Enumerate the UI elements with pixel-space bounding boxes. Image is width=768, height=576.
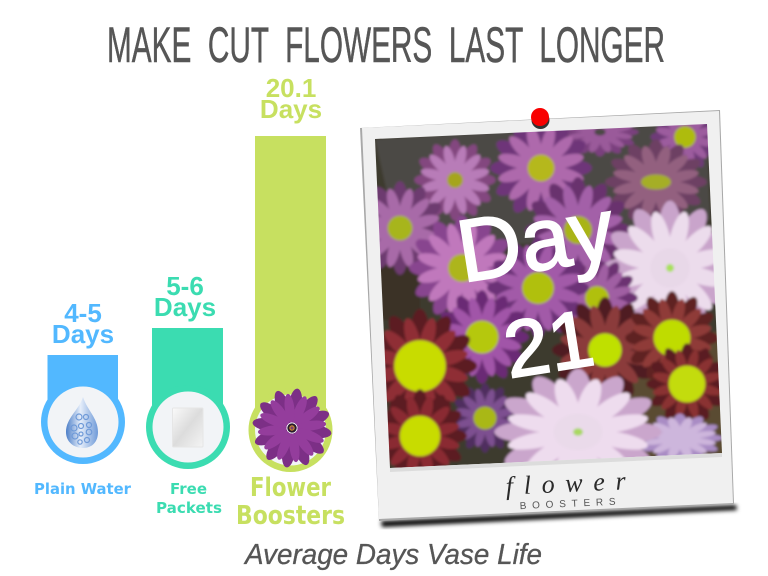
bar: plain water bbox=[41, 355, 125, 464]
photo caption: day: Day bbox=[450, 179, 620, 301]
value: 5-6 days: Days bbox=[154, 292, 216, 322]
label: plain water: Plain Water bbox=[34, 480, 132, 498]
icon: purple flower bbox=[245, 381, 339, 475]
label: flower boosters: Flower bbox=[250, 473, 331, 503]
axis caption: Average Days Vase Life bbox=[243, 539, 542, 571]
dark red flowers bbox=[384, 290, 720, 468]
icon: packet bbox=[172, 408, 203, 447]
value: 4-5 days: Days bbox=[52, 319, 114, 349]
value: 4-5 days: 4-5 bbox=[64, 298, 102, 328]
red pin bbox=[531, 108, 550, 129]
value: 5-6 days: 5-6 bbox=[166, 271, 204, 301]
upper purple flowers bbox=[377, 124, 708, 276]
bar chart: average days vase life bbox=[34, 73, 345, 531]
value: 20.1 days: Days bbox=[260, 94, 322, 124]
logo: flower boosters: flower bbox=[505, 466, 627, 501]
bar: flower boosters bbox=[245, 136, 339, 475]
bar: free packets bbox=[146, 328, 230, 469]
pale pink flower, right bbox=[604, 199, 716, 316]
polaroid photo card bbox=[350, 100, 741, 527]
label: free packets: Free bbox=[170, 480, 207, 498]
flower photograph bbox=[375, 124, 722, 468]
logo: flower boosters: BOOSTERS bbox=[519, 497, 616, 512]
photo caption: 21: 21 bbox=[498, 293, 600, 395]
label: flower boosters: Boosters bbox=[236, 501, 345, 531]
icon: water drop bbox=[66, 397, 98, 448]
middle purple flowers bbox=[406, 212, 640, 455]
value: 20.1 days: 20.1 bbox=[266, 73, 316, 103]
pale pink flower, bottom bbox=[492, 368, 722, 463]
label: free packets: Packets bbox=[156, 499, 222, 517]
